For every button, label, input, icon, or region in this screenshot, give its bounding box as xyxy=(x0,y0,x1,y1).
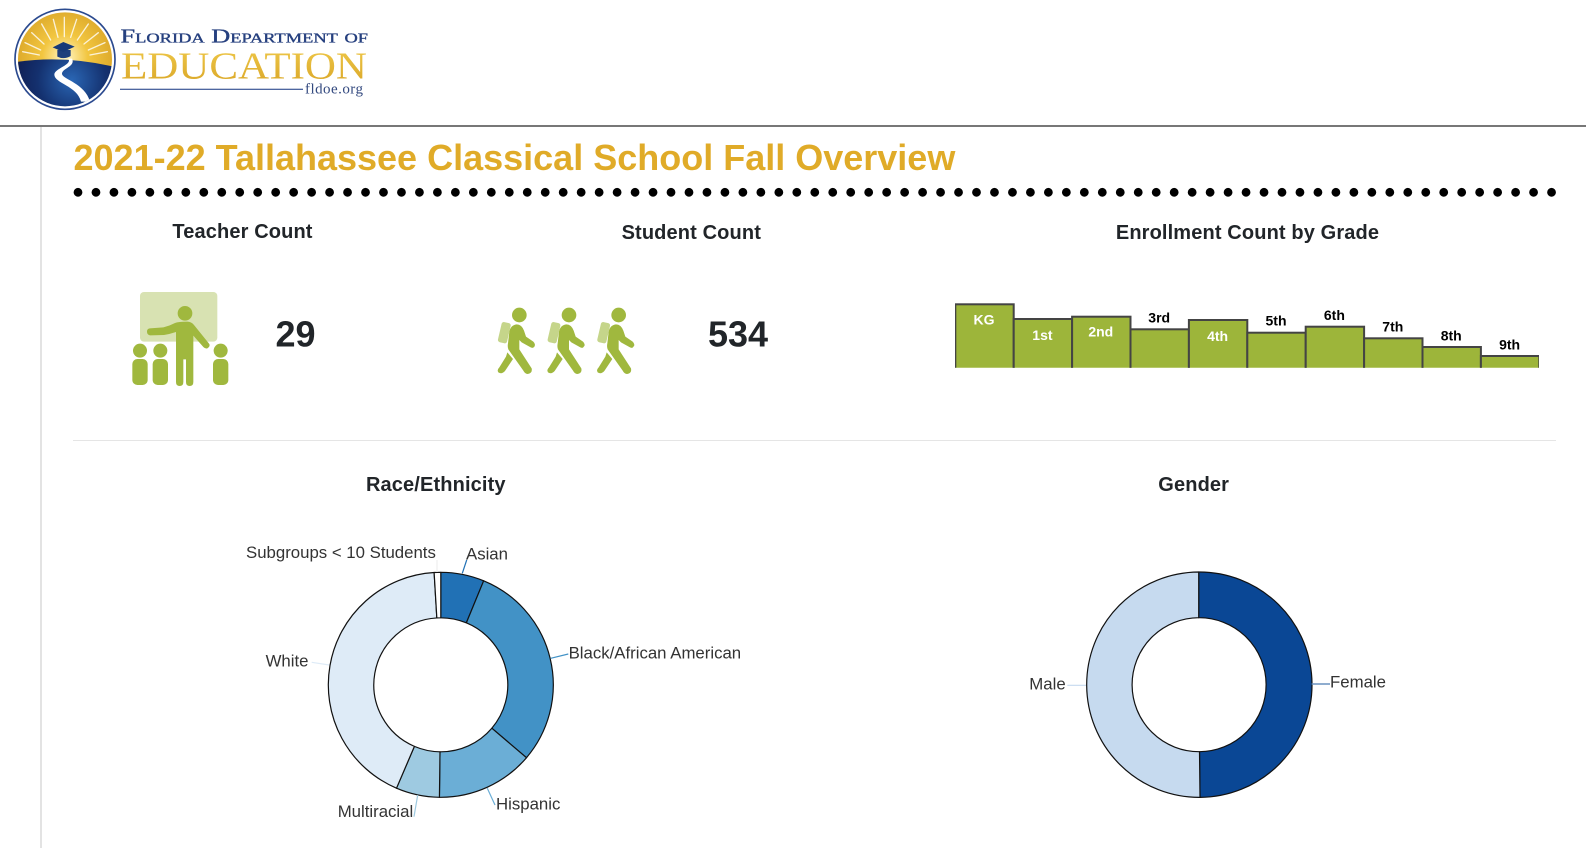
donut labels: Black/African American xyxy=(569,643,741,662)
slice: Black/African American xyxy=(466,581,553,758)
donut labels: Male xyxy=(1029,675,1066,694)
logo text: Education: EDUCATION xyxy=(121,45,367,87)
slice: Asian xyxy=(441,572,484,623)
heading: Student Count: Student Count xyxy=(622,222,761,244)
logo rule xyxy=(120,89,303,90)
donut chart: gender xyxy=(1087,572,1312,797)
bar labels: 1st xyxy=(1032,327,1053,343)
panel: race/ethnicity xyxy=(246,474,741,821)
heading: Gender: Gender xyxy=(1158,474,1229,496)
logo: Florida Department of Education xyxy=(15,9,368,113)
title: 2021-22 Tallahassee Classical School Fall Overview xyxy=(74,137,956,178)
bar labels: 5th xyxy=(1266,313,1286,329)
icon: teacher with students xyxy=(132,292,228,386)
bar labels: 3rd xyxy=(1148,310,1170,326)
donut labels xyxy=(1029,673,1386,694)
value: 534: 534 xyxy=(708,313,768,354)
bar chart: enrollment by grade xyxy=(955,303,1539,368)
donut labels: White xyxy=(266,651,309,670)
logo text: Florida Department of: Florida Department of xyxy=(120,26,368,48)
slice: Subgroups under 10 students xyxy=(434,572,441,618)
donut labels: Multiracial xyxy=(338,802,413,821)
bar labels: 2nd xyxy=(1088,324,1113,340)
logo text: fldoe.org: fldoe.org xyxy=(305,81,364,97)
panel: gender xyxy=(1029,474,1386,797)
donut labels: Subgroups < 10 Students xyxy=(246,543,436,562)
heading: Race/Ethnicity: Race/Ethnicity xyxy=(366,474,506,496)
donut leader lines xyxy=(1067,684,1330,685)
donut labels: Asian xyxy=(466,545,508,564)
donut labels xyxy=(246,543,741,821)
heading: Enrollment Count by Grade: Enrollment Count by Grade xyxy=(1116,222,1379,244)
slice: White xyxy=(328,572,437,788)
bar labels: 4th xyxy=(1207,328,1228,344)
icon: three walking students xyxy=(497,308,634,374)
bar labels: 7th xyxy=(1382,319,1403,335)
bar labels: 9th xyxy=(1499,337,1520,353)
slice: Female xyxy=(1199,572,1312,797)
value: 29: 29 xyxy=(276,314,316,355)
heading: Teacher Count: Teacher Count xyxy=(172,221,313,243)
donut labels: Female xyxy=(1330,673,1386,692)
slice: Hispanic xyxy=(439,728,526,797)
icon: state seal xyxy=(15,9,115,113)
slice: Male xyxy=(1087,572,1200,797)
bar labels: 8th xyxy=(1441,328,1462,344)
panel: enrollment count by grade xyxy=(955,224,1539,368)
dotted divider xyxy=(78,188,1552,197)
donut labels: Hispanic xyxy=(496,795,560,814)
donut chart: race/ethnicity xyxy=(328,572,553,797)
bar labels: KG xyxy=(974,312,995,328)
panel: teacher count xyxy=(132,221,316,386)
bar labels xyxy=(974,307,1520,353)
slice: Multiracial xyxy=(396,746,440,797)
panel: student count xyxy=(497,222,768,374)
bar labels: 6th xyxy=(1324,307,1345,323)
donut leader lines xyxy=(312,560,568,817)
